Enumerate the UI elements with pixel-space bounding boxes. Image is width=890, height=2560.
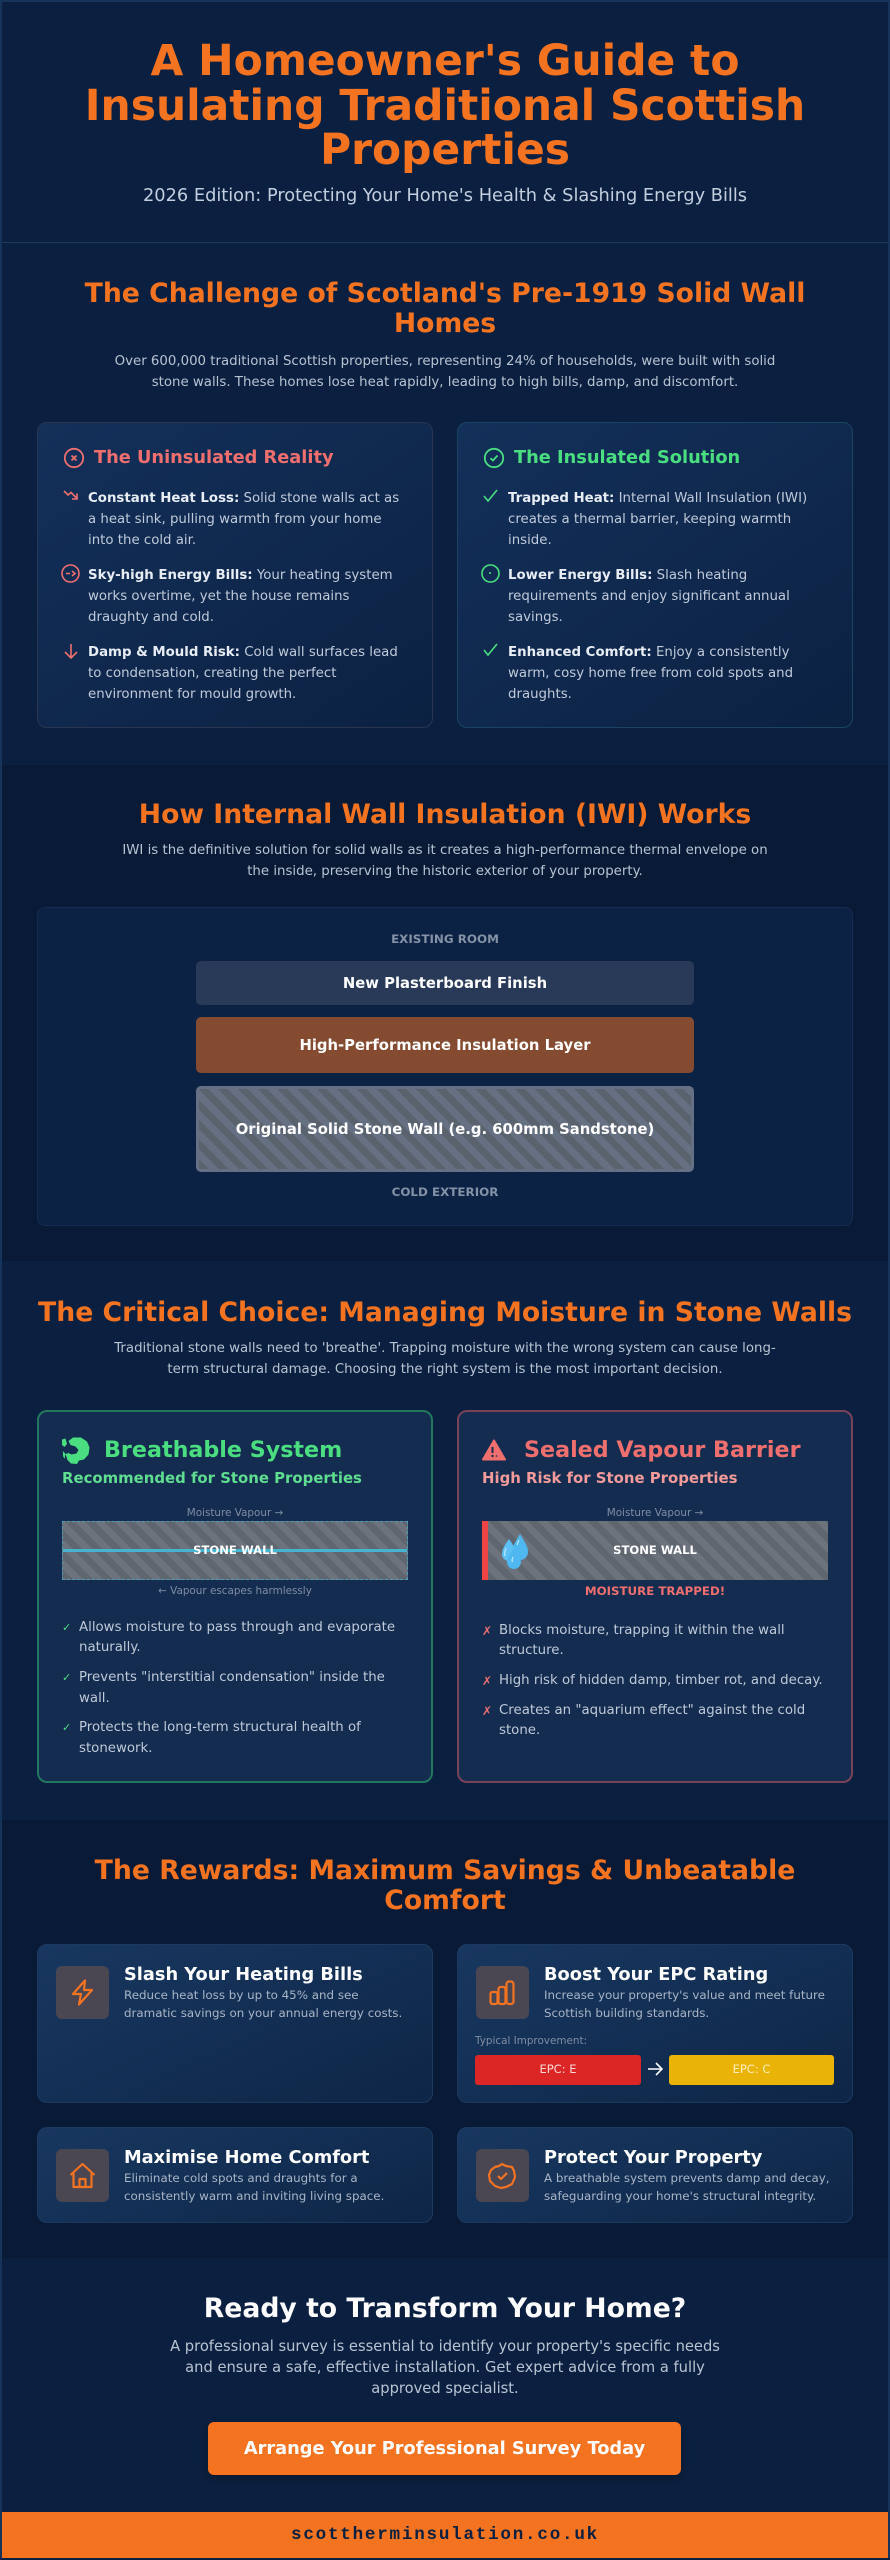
icon: check	[484, 644, 498, 656]
item: prevents condensation	[62, 1670, 385, 1706]
title: Insulating Traditional Scottish	[85, 80, 805, 130]
card heading: Boost Your EPC Rating	[544, 1964, 768, 1985]
cta button: Arrange Your Professional Survey Today	[244, 2438, 645, 2459]
arrow	[648, 2062, 663, 2076]
section: how IWI works	[0, 765, 890, 1261]
item: allows moisture	[62, 1620, 395, 1655]
list: risks: ✗	[482, 1704, 492, 1718]
card subheading: High Risk for Stone Properties	[482, 1469, 738, 1487]
item: constant heat loss: a heat sink, pulling warmth from your home	[88, 512, 382, 527]
card text: A breathable system prevents damp and decay,	[544, 2171, 830, 2185]
list: benefits: ✓	[62, 1671, 71, 1684]
card heading: Slash Your Heating Bills	[124, 1964, 363, 1985]
cta text: approved specialist.	[371, 2380, 519, 2397]
list: benefits	[62, 1620, 395, 1756]
card: slash heating bills	[37, 1944, 433, 2103]
list: benefits: ✓	[62, 1721, 71, 1734]
item: blocks moisture: Blocks moisture, trapping it within the wall	[499, 1622, 785, 1638]
layer: stone wall	[196, 1086, 694, 1172]
wall diagram: breathable	[62, 1521, 408, 1580]
intro text	[122, 843, 768, 879]
icon: lightning	[56, 1966, 109, 2019]
panel: wall layers diagram	[37, 907, 853, 1226]
card subheading: Recommended for Stone Properties	[62, 1469, 362, 1487]
card text: Scottish building standards.	[544, 2006, 709, 2020]
item: enhanced comfort	[508, 645, 793, 702]
section: call to action	[0, 2258, 890, 2511]
EPC scale	[475, 2055, 834, 2085]
card heading: Breathable System	[104, 1437, 342, 1463]
panel: breathable system	[37, 1410, 433, 1783]
label: moisture trapped: MOISTURE TRAPPED!	[585, 1584, 725, 1598]
card text: Reduce heat loss by up to 45% and see	[124, 1988, 359, 2002]
card heading: The Uninsulated Reality	[94, 447, 334, 468]
card text	[544, 1988, 825, 2020]
icon: bar chart	[476, 1966, 529, 2019]
card heading: Protect Your Property	[544, 2147, 762, 2168]
label: moisture vapour: Moisture Vapour →	[187, 1507, 283, 1519]
card: protect property	[457, 2127, 853, 2223]
intro text: Over 600,000 traditional Scottish properties, representing 24% of households, were built with solid	[115, 354, 775, 369]
item: sky-high bills: Sky-high Energy Bills: Your heating system	[88, 568, 393, 583]
title: Properties	[320, 125, 570, 174]
item: lower bills: requirements and enjoy significant annual	[508, 589, 790, 604]
icon: cross circle	[64, 448, 84, 468]
panel: sealed vapour barrier	[457, 1410, 853, 1783]
card text: consistently warm and inviting living space.	[124, 2189, 384, 2203]
item: protects stonework: stonework.	[79, 1741, 152, 1756]
list: risks	[482, 1622, 823, 1738]
title	[85, 36, 805, 174]
panel: the insulated solution	[457, 422, 853, 728]
item: enhanced comfort: warm, cosy home free from cold spots and	[508, 666, 793, 681]
EPC E: EPC: E	[539, 2062, 577, 2076]
icon: check circle	[484, 448, 504, 468]
item: blocks moisture	[482, 1622, 785, 1658]
intro text: Traditional stone walls need to 'breathe'. Trapping moisture with the wrong system can cause long-	[114, 1341, 776, 1356]
subtitle: 2026 Edition: Protecting Your Home's Health & Slashing Energy Bills	[143, 185, 747, 206]
card text: safeguarding your home's structural integrity.	[544, 2189, 816, 2203]
title: A Homeowner's Guide to	[151, 36, 739, 85]
item: trapped heat: creates a thermal barrier, keeping warmth	[508, 512, 791, 527]
footer url: scottherminsulation.co.uk	[291, 2525, 599, 2545]
item: sky-high bills: works overtime, yet the house remains	[88, 589, 349, 604]
icon: house	[56, 2149, 109, 2202]
item: high risk: High risk of hidden damp, timber rot, and decay.	[499, 1672, 823, 1688]
section heading: The Rewards: Maximum Savings & Unbeatable	[95, 1854, 795, 1886]
item: damp risk: environment for mould growth.	[88, 687, 296, 702]
cta button	[208, 2422, 681, 2475]
item: damp risk: Damp & Mould Risk: Cold wall surfaces lead	[88, 645, 398, 660]
card: maximise comfort	[37, 2127, 433, 2223]
item: lower bills: Lower Energy Bills: Slash heating	[508, 568, 747, 583]
item: enhanced comfort: Enhanced Comfort: Enjoy a consistently	[508, 645, 789, 660]
item: aquarium effect	[482, 1702, 805, 1738]
card text: dramatic savings on your annual energy costs.	[124, 2006, 402, 2020]
item: protects stonework: Protects the long-term structural health of	[79, 1720, 361, 1735]
layer: plasterboard: New Plasterboard Finish	[343, 974, 547, 992]
item: lower bills: savings.	[508, 610, 563, 625]
item: constant heat loss: into the cold air.	[88, 533, 196, 548]
label: vapour escapes: ← Vapour escapes harmlessly	[158, 1585, 312, 1597]
card heading: The Insulated Solution	[514, 447, 740, 468]
cta text: A professional survey is essential to identify your property's specific needs	[170, 2338, 720, 2355]
card text: Eliminate cold spots and draughts for a	[124, 2171, 358, 2185]
intro text: the inside, preserving the historic exterior of your property.	[247, 864, 643, 879]
section heading: Comfort	[384, 1885, 506, 1916]
EPC C	[669, 2055, 834, 2085]
list: risks: ✗	[482, 1624, 492, 1638]
icon: check	[484, 490, 498, 502]
item: aquarium effect: stone.	[499, 1723, 540, 1738]
intro text: term structural damage. Choosing the right system is the most important decision.	[167, 1362, 723, 1377]
cta text: and ensure a safe, effective installation. Get expert advice from a fully	[185, 2359, 705, 2376]
item: allows moisture: naturally.	[79, 1640, 141, 1655]
item: enhanced comfort: draughts.	[508, 687, 572, 702]
item: prevents condensation: wall.	[79, 1691, 110, 1706]
layer: insulation	[196, 1017, 694, 1073]
icon: gauge circle	[481, 564, 500, 583]
item: protects stonework	[62, 1720, 362, 1756]
icon: globe	[62, 1438, 90, 1464]
layer: plasterboard	[196, 961, 694, 1005]
icon: arrow down	[64, 644, 78, 659]
item: allows moisture: Allows moisture to pass through and evaporate	[79, 1620, 395, 1634]
cta heading: Ready to Transform Your Home?	[204, 2293, 686, 2324]
icon: warning triangle	[482, 1440, 506, 1460]
list: benefits: ✓	[62, 1620, 71, 1634]
section: the critical choice	[0, 1261, 890, 1820]
layer: stone wall: Original Solid Stone Wall (e.g. 600mm Sandstone)	[236, 1120, 654, 1138]
wall label: STONE WALL	[193, 1543, 277, 1557]
wall label: STONE WALL	[613, 1543, 697, 1557]
item: damp risk: to condensation, creating the perfect	[88, 666, 336, 681]
EPC C: EPC: C	[733, 2062, 770, 2076]
item: trapped heat	[508, 491, 807, 548]
intro text	[114, 1341, 776, 1377]
item: aquarium effect: Creates an "aquarium effect" against the cold	[499, 1702, 805, 1718]
icon: water drops	[502, 1534, 528, 1569]
card text	[124, 2171, 384, 2203]
header section	[0, 0, 890, 243]
section: the rewards	[0, 1820, 890, 2258]
item: trapped heat: inside.	[508, 533, 552, 548]
section heading: The Challenge of Scotland's Pre-1919 Solid Wall	[85, 278, 805, 308]
item: lower bills	[508, 568, 790, 625]
item: damp risk	[88, 645, 398, 702]
footer	[0, 2511, 890, 2558]
item: sky-high bills: draughty and cold.	[88, 610, 214, 625]
panel: the uninsulated reality	[37, 422, 433, 728]
label: typical improvement: Typical Improvement:	[475, 2035, 587, 2047]
card text	[124, 1988, 402, 2020]
cta text	[170, 2338, 720, 2397]
list: risks: ✗	[482, 1674, 492, 1688]
section: the challenge	[0, 243, 890, 765]
vapour line	[63, 1549, 407, 1552]
card: boost EPC rating	[457, 1944, 853, 2103]
section heading: Homes	[394, 308, 496, 339]
intro text: stone walls. These homes lose heat rapidly, leading to high bills, damp, and discomfort.	[152, 375, 738, 390]
card text	[544, 2171, 830, 2203]
section heading: How Internal Wall Insulation (IWI) Works	[139, 798, 751, 830]
layer: insulation: High-Performance Insulation Layer	[299, 1036, 591, 1054]
label: cold exterior: COLD EXTERIOR	[392, 1185, 498, 1199]
icon: trending down	[64, 490, 78, 500]
item: sky-high bills	[88, 568, 393, 625]
intro text	[115, 354, 775, 390]
icon: shield check	[476, 2149, 529, 2202]
item: blocks moisture: structure.	[499, 1643, 564, 1658]
item: trapped heat: Trapped Heat: Internal Wall Insulation (IWI)	[508, 491, 807, 506]
EPC E	[475, 2055, 641, 2085]
item: constant heat loss	[88, 491, 399, 548]
section heading	[94, 1854, 795, 1916]
card heading: Sealed Vapour Barrier	[524, 1437, 801, 1463]
wall diagram: sealed	[482, 1521, 828, 1580]
card text: Increase your property's value and meet future	[544, 1988, 825, 2002]
label: moisture vapour: Moisture Vapour →	[607, 1507, 703, 1519]
card heading: Maximise Home Comfort	[124, 2147, 369, 2168]
item: prevents condensation: Prevents "interstitial condensation" inside the	[79, 1670, 385, 1685]
section heading: The Critical Choice: Managing Moisture in Stone Walls	[38, 1296, 852, 1328]
section heading	[84, 278, 805, 339]
item: constant heat loss: Constant Heat Loss: Solid stone walls act as	[88, 491, 399, 506]
label: existing room: EXISTING ROOM	[391, 932, 499, 946]
intro text: IWI is the definitive solution for solid walls as it creates a high-performance thermal envelope on	[122, 843, 768, 858]
icon: gauge circle	[61, 564, 80, 583]
